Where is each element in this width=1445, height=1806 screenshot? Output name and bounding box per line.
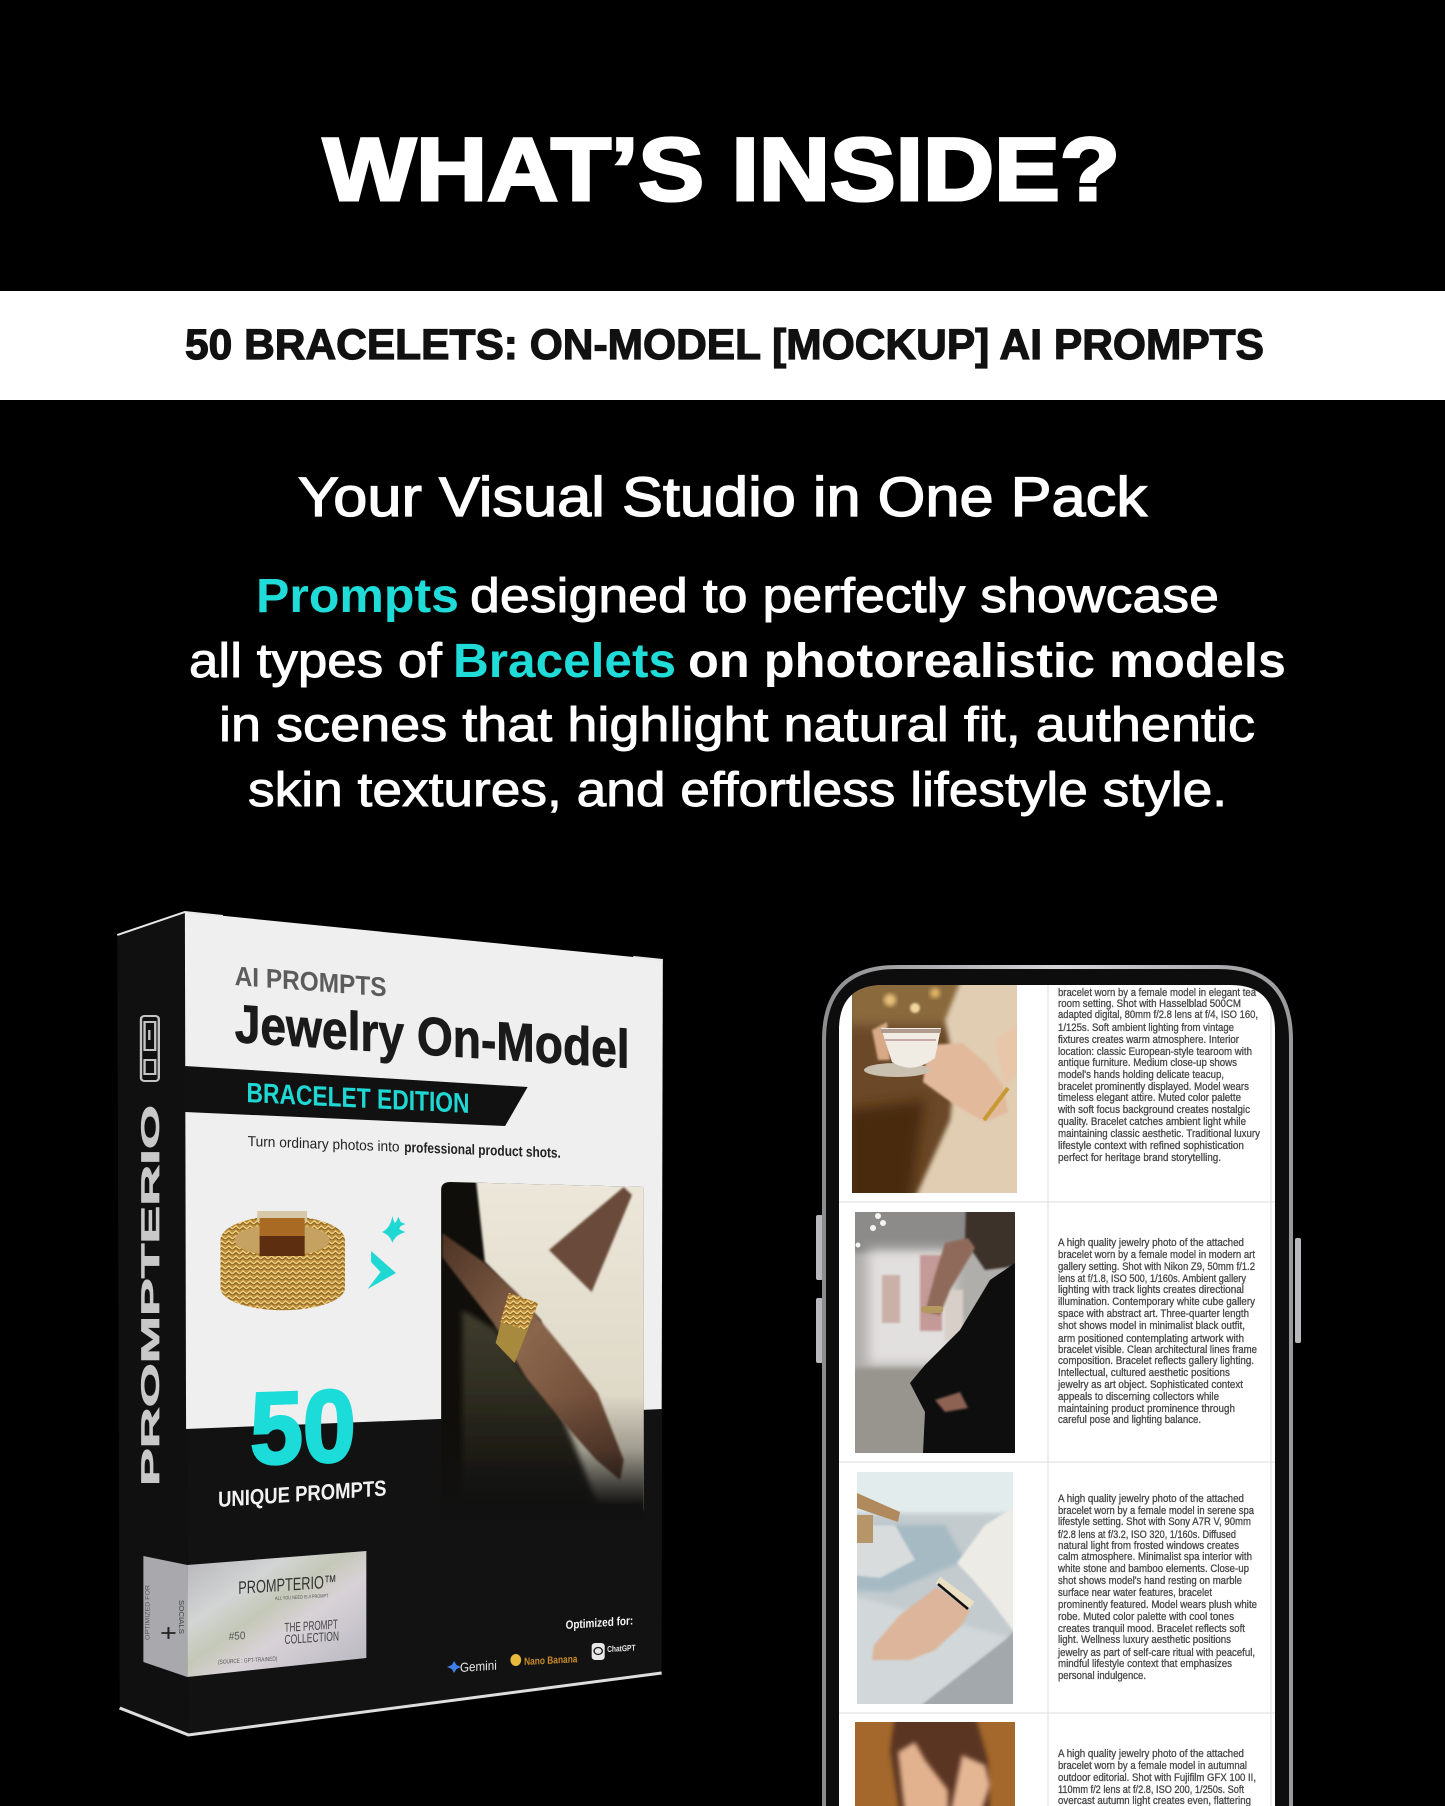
prompt text column: outdoor editorial. Shot with Fujifilm GFX 100 II, <box>1058 1772 1256 1784</box>
table grid lines <box>839 985 1275 1806</box>
photo: model wearing bracelet <box>441 1182 644 1511</box>
phone mockup <box>816 967 1301 1806</box>
optimized for: Nano Banana <box>524 1654 578 1668</box>
spine brand text: PROMPTERIO <box>136 1105 164 1486</box>
prompt text column: space with abstract art. Three-quarter length <box>1058 1308 1249 1320</box>
prompt text column: timeless elegant attire. Muted color palette <box>1058 1092 1241 1104</box>
prompt text column: personal indulgence. <box>1058 1670 1146 1682</box>
prompt text column: robe. Muted color palette with cool tones <box>1058 1611 1234 1623</box>
photo 2: art gallery <box>855 1212 1015 1453</box>
prompt text column: 110mm f/2 lens at f/2.8, ISO 200, 1/250s. Soft <box>1058 1784 1244 1796</box>
prompt text column: shot shows model's hand resting on marble <box>1058 1575 1242 1587</box>
box tagline: Turn ordinary photos into <box>248 1134 400 1155</box>
phone screen <box>839 975 1275 1806</box>
icon: chevron arrow <box>368 1251 396 1289</box>
prompt text column: prominently featured. Model wears plush white <box>1058 1599 1257 1611</box>
prompt text column: creates tranquil mood. Bracelet reflects soft <box>1058 1623 1245 1635</box>
big number 50: 50 <box>250 1368 356 1486</box>
holographic sticker: + <box>152 1626 184 1640</box>
prompt text column <box>1057 987 1261 1806</box>
unique prompts label: UNIQUE PROMPTS <box>218 1476 387 1512</box>
prompt text column: A high quality jewelry photo of the attached <box>1058 1237 1244 1249</box>
description text block: on photorealistic models <box>688 635 1286 688</box>
prompt text column: room setting. Shot with Hasselblad 500CM <box>1058 998 1241 1010</box>
prompt text column: maintaining product prominence through <box>1058 1403 1235 1415</box>
prompt text column: jewelry as part of self-care ritual with peaceful, <box>1057 1647 1255 1659</box>
prompt text column: illumination. Contemporary white cube gallery <box>1058 1296 1256 1308</box>
prompt text column: bracelet worn by a female model in elegant tea <box>1058 987 1256 999</box>
holographic sticker: THE PROMPT <box>285 1617 338 1636</box>
prompt text column: perfect for heritage brand storytelling. <box>1058 1152 1221 1164</box>
spine logo icon <box>141 1016 159 1081</box>
prompt text column: light. Wellness luxury aesthetic positions <box>1058 1634 1231 1646</box>
prompt text column: quality. Bracelet catches ambient light while <box>1058 1116 1246 1128</box>
prompt text column: 1/125s. Soft ambient lighting from vintage <box>1058 1022 1234 1034</box>
prompt text column: location: classic European-style tearoom with <box>1058 1046 1252 1058</box>
holographic sticker: (SOURCE : GPT-TRAINED) <box>218 1656 277 1666</box>
optimized for: ChatGPT <box>607 1643 636 1654</box>
prompt text column: bracelet worn by a female model in modern art <box>1058 1249 1255 1261</box>
prompt text column: f/2.8 lens at f/3.2, ISO 320, 1/160s. Diffused <box>1058 1529 1236 1541</box>
description text block: Bracelets <box>453 635 676 688</box>
prompt text column: bracelet visible. Clean architectural lines frame <box>1058 1344 1257 1356</box>
prompt text column: bracelet worn by a female model in serene spa <box>1058 1505 1254 1517</box>
prompt text column: Intellectual, cultured aesthetic positions <box>1058 1367 1230 1379</box>
prompt text column: bracelet worn by a female model in autumnal <box>1058 1760 1247 1772</box>
edition label: BRACELET EDITION <box>247 1076 470 1119</box>
prompt text column: fixtures creates warm atmosphere. Interior <box>1058 1034 1239 1046</box>
prompt text column: natural light from frosted windows creates <box>1058 1540 1239 1552</box>
prompt text column: A high quality jewelry photo of the attached <box>1058 1748 1244 1760</box>
label: AI prompts: AI PROMPTS <box>235 961 386 1003</box>
holographic sticker: COLLECTION <box>285 1629 339 1648</box>
box title: Jewelry On-Model <box>235 993 630 1080</box>
holographic sticker <box>143 1551 366 1677</box>
prompt text column: composition. Bracelet reflects gallery lighting. <box>1058 1355 1254 1367</box>
prompt text column: calm atmosphere. Minimalist spa interior with <box>1058 1551 1252 1563</box>
prompt text column: bracelet prominently displayed. Model wears <box>1058 1081 1249 1093</box>
subtitle band <box>0 291 1445 400</box>
prompt text column: lighting with track lights creates directional <box>1058 1284 1244 1296</box>
prompt text column: lifestyle setting. Shot with Sony A7R V, 90mm <box>1058 1516 1251 1528</box>
title: WHAT’S INSIDE? <box>323 119 1120 219</box>
box front face <box>185 912 663 1735</box>
box white panel <box>185 912 663 1429</box>
box edges <box>117 912 663 1735</box>
phone frame <box>824 967 1291 1806</box>
photo 3: spa <box>857 1472 1013 1704</box>
prompt text column: white stone and bamboo elements. Close-up <box>1057 1563 1249 1575</box>
prompt text column: lifestyle context with refined sophistication <box>1058 1140 1244 1152</box>
product box <box>117 912 671 1735</box>
description text block: all types of <box>189 635 443 688</box>
prompt text column: appeals to discerning collectors while <box>1058 1391 1219 1403</box>
prompt text column: A high quality jewelry photo of the attached <box>1058 1493 1244 1505</box>
box tagline <box>248 1134 561 1161</box>
phone side buttons <box>816 1215 1301 1363</box>
heading: your visual studio: Your Visual Studio in One Pack <box>298 465 1148 528</box>
holographic sticker: PROMPTERIO™ <box>238 1572 337 1599</box>
ribbon <box>185 1066 528 1126</box>
description text block: in scenes that highlight natural fit, authentic <box>219 699 1255 752</box>
prompt text column: lens at f/1.8, ISO 500, 1/160s. Ambient gallery <box>1058 1273 1247 1285</box>
photo 4: autumn <box>855 1715 1015 1806</box>
prompt text column: shot shows model in minimalist black outfit, <box>1058 1320 1245 1332</box>
optimized for <box>447 1614 636 1676</box>
prompt text column: arm positioned contemplating artwork with <box>1058 1333 1244 1345</box>
box tagline: professional product shots. <box>404 1140 561 1161</box>
icon: sparkle <box>382 1216 405 1243</box>
prompt text column: surface near water features, bracelet <box>1058 1587 1212 1599</box>
prompt text column: jewelry as art object. Sophisticated context <box>1057 1379 1243 1391</box>
bracelet product image <box>220 1211 345 1310</box>
prompt text column: model's hands holding delicate teacup, <box>1058 1069 1224 1081</box>
subtitle band: 50 BRACELETS: ON-MODEL [MOCKUP] AI PROMPTS <box>185 321 1264 369</box>
holographic sticker: SOCIALS <box>177 1600 184 1635</box>
prompt text column: gallery setting. Shot with Nikon Z9, 50mm f/1.2 <box>1058 1261 1255 1273</box>
holographic sticker: OPTIMIZED FOR <box>145 1584 151 1640</box>
holographic sticker: ALL YOU NEED IS A PROMPT <box>275 1594 329 1602</box>
prompt text column: adapted digital, 80mm f/2.8 lens at f/4, ISO 160, <box>1058 1009 1258 1021</box>
description text block: designed to perfectly showcase <box>470 570 1219 623</box>
optimized for: Gemini <box>460 1659 497 1676</box>
description text block: skin textures, and effortless lifestyle style. <box>248 764 1227 817</box>
optimized for: Optimized for: <box>566 1614 633 1632</box>
photo 1: teacup <box>852 985 1017 1193</box>
description text block: Prompts <box>256 570 459 623</box>
prompt text column: antique furniture. Medium close-up shows <box>1058 1057 1237 1069</box>
box spine <box>117 912 188 1735</box>
prompt text column: mindful lifestyle context that emphasizes <box>1058 1658 1232 1670</box>
prompt text column: with soft focus background creates nostalgic <box>1057 1104 1251 1116</box>
holographic sticker: #50 <box>229 1629 246 1643</box>
prompt text column: maintaining classic aesthetic. Traditional luxury <box>1058 1128 1261 1140</box>
prompt text column: careful pose and lighting balance. <box>1058 1414 1201 1426</box>
description text block <box>189 570 1286 817</box>
